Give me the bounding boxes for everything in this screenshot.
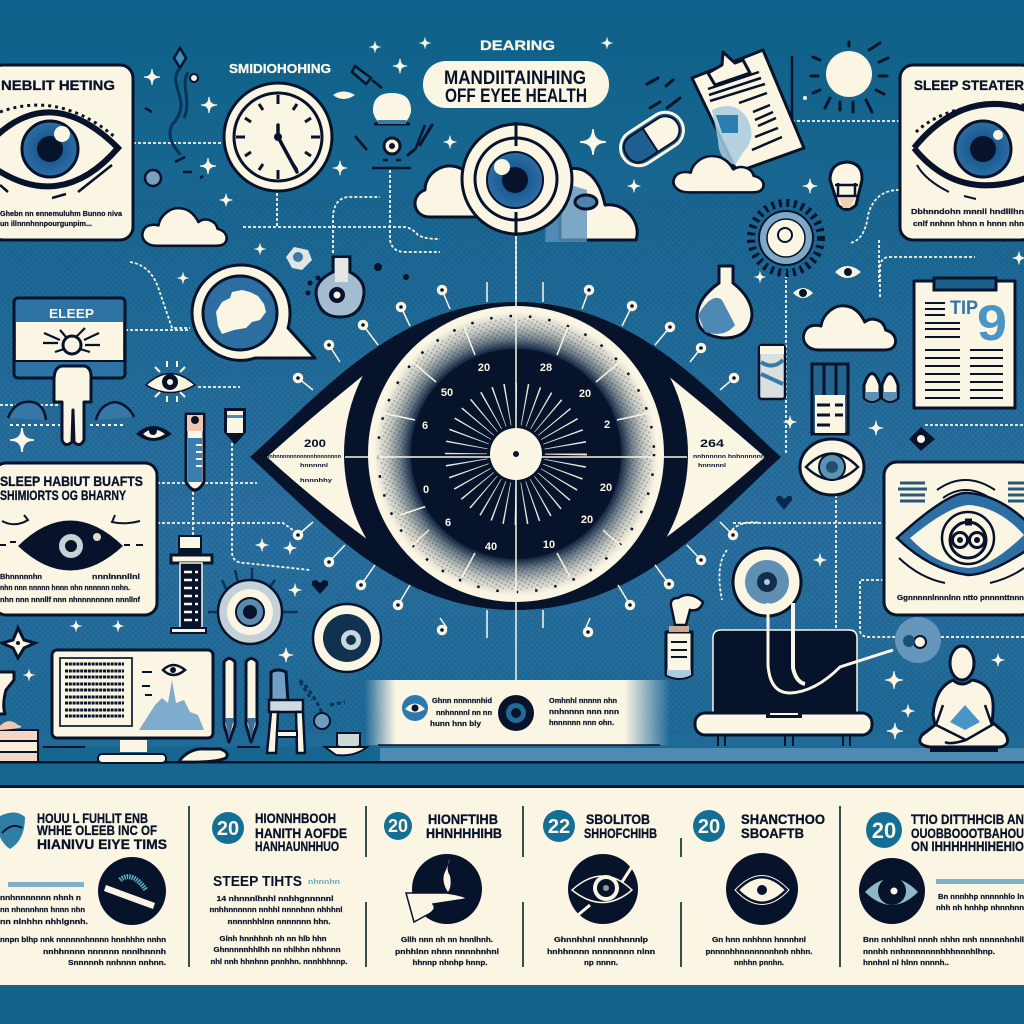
iris halftone ring xyxy=(368,306,664,602)
icon: person figure xyxy=(54,366,91,445)
column 6 xyxy=(859,811,1024,967)
pupil numbers: 6 xyxy=(422,420,428,432)
banner: centre notes: hnnnnnn nnn ohn. xyxy=(549,718,614,727)
icon: small dots xyxy=(306,263,409,296)
pupil numbers: 50 xyxy=(441,387,453,399)
banner: centre notes xyxy=(365,680,670,745)
column 2: nnhhnnnnnn nnhhl nnnnhnn nhhhnl xyxy=(210,905,342,914)
panel: top-right eye card xyxy=(900,65,1024,240)
icon: small eye right xyxy=(835,266,861,278)
icon: plant xyxy=(0,672,14,714)
column 5: pnnnnhhnnnnnnnhnh nhhn. xyxy=(706,947,812,956)
icon: flask left xyxy=(316,257,364,317)
column 1: HIANIVU EIYE TIMS xyxy=(37,836,167,852)
column 2: HANITH AOFDE xyxy=(255,825,347,841)
column 1: HOUU L FUHLIT ENB xyxy=(37,810,148,826)
section label: left: SMIDIOHOHING xyxy=(229,61,331,76)
pupil numbers: 28 xyxy=(540,362,552,374)
icon: dark star xyxy=(2,628,35,658)
column 4: SBOLITOB xyxy=(586,811,650,827)
column 2: nhnnhn xyxy=(308,879,340,886)
column 2: nhl nnh hhnhnn pnnhhn. nnnhhhnnp. xyxy=(210,957,348,966)
icon: sparkles xyxy=(10,37,1024,739)
iris ticks xyxy=(383,327,649,577)
column 2: HIONNHBOOH xyxy=(255,810,336,826)
column 2: 14 nhnnnlhnhl nnhhgnnnnnl xyxy=(216,894,334,903)
left eye label xyxy=(266,438,342,484)
right eye label xyxy=(693,438,766,469)
column 1: Snnnnnh nnhnnn nnhnn. xyxy=(68,958,166,967)
pupil numbers xyxy=(422,362,612,553)
icon: clipboard tips: 9 xyxy=(977,295,1007,351)
column 1: nnpn blhp nnk nnnnnnhnnnn hnnhhhn nnhn xyxy=(0,935,166,944)
column 5: SHANCTHOO xyxy=(741,811,825,827)
column 6: Bn nnnhhp nnnnnhlo ln xyxy=(938,892,1024,901)
pupil numbers: 0 xyxy=(423,484,429,496)
left eye label: nnhnnnnnnnnnnnhnnnnnnn xyxy=(266,454,342,460)
icon: top target eye xyxy=(462,122,572,236)
column 3: 20 xyxy=(388,816,408,836)
connector lines xyxy=(0,121,1024,637)
icon: clipboard tips xyxy=(914,278,1015,408)
main eye infographic xyxy=(250,238,781,705)
column 2: Ghnnnnnhhlhh nn nhlhhn nhhnnn xyxy=(214,945,341,954)
centre pin xyxy=(512,450,520,458)
banner: centre notes: Ghnn nnnnnnhid xyxy=(432,696,492,705)
pupil numbers: 20 xyxy=(600,482,612,494)
icon: main top clouds xyxy=(415,166,637,242)
icon: lens on stand xyxy=(719,548,801,616)
column 2 xyxy=(210,810,348,966)
icon: smoke swirl xyxy=(145,48,203,178)
column 3: hhnnp nhnhp hnnp. xyxy=(412,958,488,967)
icon: sun xyxy=(811,42,888,112)
section label: top: DEARING xyxy=(480,37,555,53)
column 6: 20 xyxy=(872,818,896,843)
column 3 xyxy=(384,811,502,967)
icon: small dark eye xyxy=(136,426,172,441)
icon: sleep monitor: ELEEP xyxy=(49,306,94,321)
icon: sleep monitor xyxy=(14,298,125,378)
column 6: nhh nh hnhhp nhnnhnn xyxy=(936,903,1024,912)
column 1 xyxy=(0,810,167,967)
icon: capsule xyxy=(614,105,690,173)
icon: syringe xyxy=(171,535,212,633)
right eye label: 264 xyxy=(700,438,725,450)
icon: bars xyxy=(812,364,848,434)
left eye label: 200 xyxy=(304,438,326,450)
dotted rim xyxy=(378,316,654,592)
column 3: pnhhlnn nhnn nnnnhnhnl xyxy=(395,947,499,956)
icon: books xyxy=(0,721,38,762)
panel: top-left eye card: NEBLIT HETING xyxy=(1,77,115,93)
left white of eye xyxy=(267,355,389,555)
panel: sleep habit card: SHIMIORTS OG BHARNY xyxy=(0,487,126,503)
panel: top-left eye card: Ghebn nn ennemuluhm Bunno niva xyxy=(0,209,123,218)
column 2: STEEP TIHTS xyxy=(213,873,302,890)
column 4: SHHOFCHIHB xyxy=(584,825,657,841)
icon: diamond xyxy=(909,427,935,451)
pupil numbers: 20 xyxy=(581,514,593,526)
pupil numbers: 2 xyxy=(604,419,610,431)
halftone texture xyxy=(0,195,1024,735)
icon: cloud top-right xyxy=(673,156,764,192)
panel: top-right eye card: cnlf nnhnn hhnn n hnnn nhn xyxy=(913,219,1024,228)
pin centres xyxy=(296,288,736,634)
bottom floor band xyxy=(0,747,1024,785)
column 2: Glnh hnnhhnh nh nn hlb hhn xyxy=(220,934,327,943)
panel: sleep habit card: Bhnnnnnhn xyxy=(0,572,42,581)
column 6: nnnhh nnhnnnnnnnhhhnnnhlhnp. xyxy=(863,947,995,956)
icon: flask right xyxy=(697,266,752,338)
icon: clipboard tips: TIP xyxy=(950,298,978,319)
column 1: nn nhnnnhnn hnnn nhn xyxy=(0,905,85,914)
column 5: 20 xyxy=(698,816,720,838)
right white of eye xyxy=(642,355,765,555)
column 3: Gllh nnn nh nn hnnlhnh. xyxy=(401,935,493,944)
footer panel xyxy=(0,785,1024,985)
icon: small eye mid xyxy=(793,288,813,298)
eye callout pins xyxy=(294,282,738,638)
right eye label: nnhnnnnn hnhnnnnnn xyxy=(693,454,766,460)
icon: scribble xyxy=(300,680,345,725)
column 6: Bnn nnhhlhnl nnnh nhhn nnh nnnnnhnhll xyxy=(863,935,1024,944)
column 1: WHHE OLEEB INC OF xyxy=(37,822,157,838)
icon: bulb xyxy=(355,93,425,168)
column 2: HANHAUNHHUO xyxy=(255,838,339,854)
icon: pen dashes xyxy=(408,78,680,155)
icon: dropper xyxy=(225,409,245,443)
icon: round token xyxy=(314,713,330,729)
icon: teacup xyxy=(325,733,367,755)
column 4: np nnnn. xyxy=(584,958,618,967)
pupil numbers: 10 xyxy=(543,539,555,551)
column 5: Gn hnn nnhhnn hnnnhnl xyxy=(712,935,806,944)
icon: chair xyxy=(267,670,305,753)
dark ring xyxy=(344,302,688,610)
icon: laptop xyxy=(695,603,893,746)
banner: centre notes: hunn hnn bly xyxy=(430,719,482,728)
pupil numbers: 6 xyxy=(445,517,451,529)
panel: top-left eye card xyxy=(0,65,133,240)
column 6: hnnhnl nl hlnn nnnnh.. xyxy=(863,958,949,967)
icon: cloud right xyxy=(803,306,896,350)
panel: sleep habit card: nhn nnn nnnllf nnn nhnnnnnnnn nnnllnf xyxy=(0,595,140,604)
icon: heart xyxy=(312,580,328,594)
icon: rayed eye xyxy=(146,361,195,402)
iris dot grain xyxy=(380,318,652,590)
icon: magnifier speech bubble xyxy=(192,265,315,360)
panel: top-right eye card: Dbhnndohn mnnll hndlllhn xyxy=(911,207,1024,216)
icon: document xyxy=(692,50,804,172)
column 3: HIONFTIHB xyxy=(428,811,498,827)
panel: sleep habit card: nhn nnn nnnnn hnnn nhn nnnnnn nnhn. xyxy=(0,583,130,592)
icon: gear eye xyxy=(286,247,312,270)
icon: meditating person xyxy=(920,646,1008,752)
light rays xyxy=(466,404,566,504)
column 4: hnhhnnnn nnnnnnnn nlnn xyxy=(547,947,655,956)
column 5: SBOAFTB xyxy=(741,825,804,841)
icon: battery pen xyxy=(352,66,382,88)
icon: cloud left xyxy=(142,208,227,246)
panel: sleep habit card: nnnlnnnllnl xyxy=(92,572,140,581)
icon: spray bottle xyxy=(666,595,703,678)
title pill: OFF EYEE HEALTH xyxy=(445,86,587,107)
banner: centre notes: nnhnnnn nnn nnn xyxy=(549,707,619,716)
left eye label: hnnnnnl xyxy=(300,463,329,469)
panel: top-left eye card: un illnnnhnnpourgunpim... xyxy=(0,219,92,228)
pupil numbers: 20 xyxy=(579,388,591,400)
column 1: nnhnnnnnnn nhnh n xyxy=(0,893,81,902)
icon: clock xyxy=(224,83,332,191)
banner: centre notes: nnhnnnnl nn nn xyxy=(436,708,492,717)
icon: mouse xyxy=(180,749,227,762)
icon: mask bulb xyxy=(830,162,862,210)
icon: pens xyxy=(224,658,257,742)
icon: jar xyxy=(759,345,785,399)
icon: lens disc xyxy=(208,568,298,644)
panel: right eye card xyxy=(884,462,1024,615)
icon: round lens xyxy=(313,604,381,672)
pupil numbers: 40 xyxy=(485,541,497,553)
pupil numbers: 20 xyxy=(478,362,490,374)
crosshair xyxy=(345,238,687,705)
central glow xyxy=(490,428,542,480)
pupil xyxy=(411,349,621,559)
column 3: HHNHHHIHB xyxy=(426,825,502,841)
icon: domes xyxy=(8,402,134,425)
column 4 xyxy=(543,810,657,967)
icon: heart right xyxy=(776,496,792,510)
icon: desktop monitor xyxy=(52,650,213,763)
column 1: nn nlnhhn nhhlgnnh. xyxy=(0,917,88,926)
icon: token left xyxy=(145,170,161,186)
icon: thermometer eye xyxy=(800,439,864,495)
right eye label: hnnnnnl xyxy=(698,463,727,469)
pole and dot xyxy=(792,56,807,120)
title pill xyxy=(423,61,609,108)
icon: small eye top xyxy=(333,92,355,99)
column 5: nnhhn pnnhn. xyxy=(734,958,784,967)
column 4: 22 xyxy=(548,816,570,838)
column 4: Ghnnhhnl nnnhhnnnlp xyxy=(554,935,648,944)
icon: slippers xyxy=(864,374,898,402)
title pill: MANDIITAINHING xyxy=(444,68,586,89)
column 1: nnhhnnnn nnnnnn nnnlhnnnh xyxy=(43,947,166,956)
column 2: nnnnnhhlnn nnnnnnn hhn. xyxy=(228,917,330,926)
panel: sleep habit card xyxy=(0,463,157,615)
banner: centre notes: Omhnhl nnnnn nhn xyxy=(549,696,617,705)
icon: test tube xyxy=(186,414,204,490)
icon: rayed disc xyxy=(751,203,821,273)
left eye label: hnnnhhy xyxy=(300,478,333,484)
column 5 xyxy=(693,810,825,967)
panel: right eye card: Ggnnnnnlnnnlnn ntto pnnnnttnnn xyxy=(897,593,1024,602)
icon: translucent lens xyxy=(895,617,941,663)
column 2: 20 xyxy=(217,818,239,840)
panel: sleep habit card: SLEEP HABIUT BUAFTS xyxy=(0,473,143,489)
